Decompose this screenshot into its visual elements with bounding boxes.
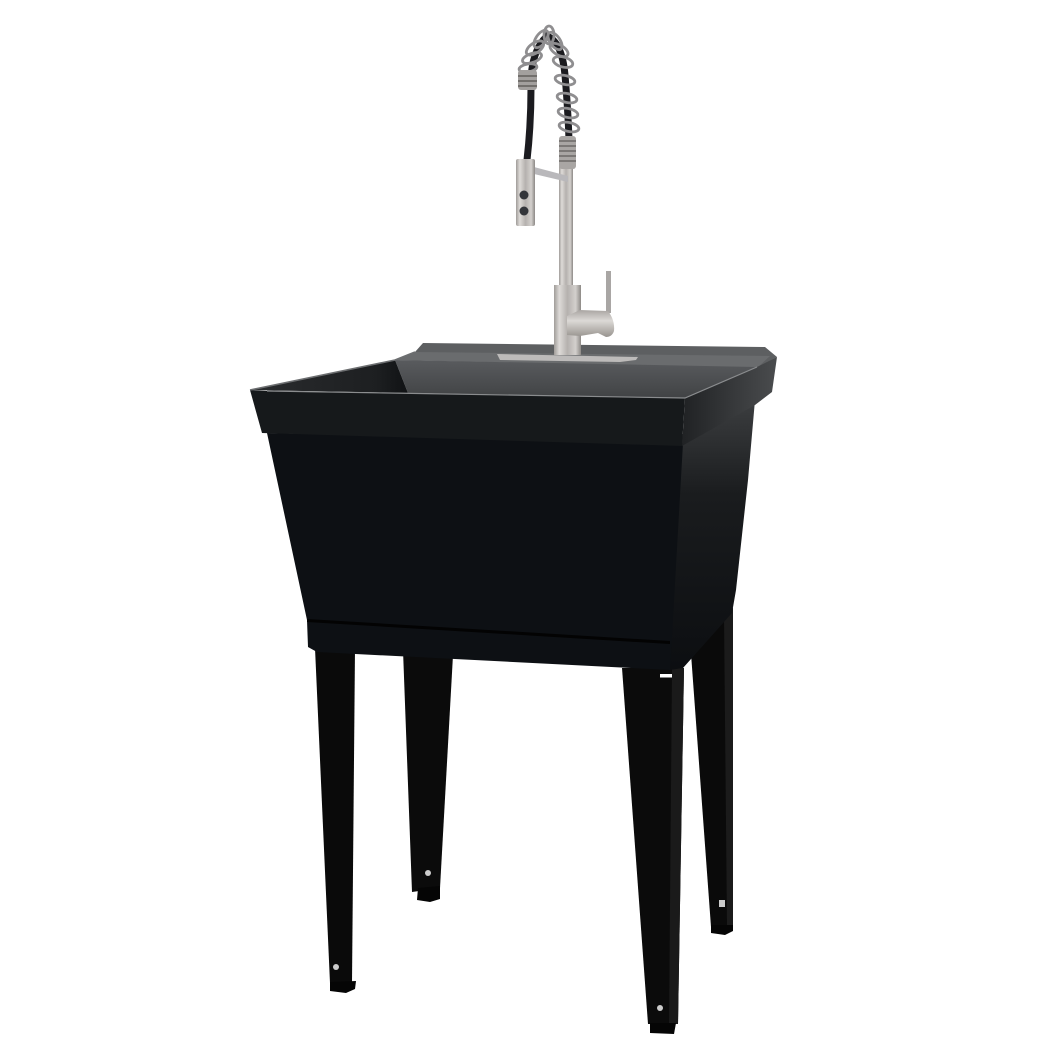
front rim [250, 390, 685, 446]
faucet [516, 26, 614, 355]
rim highlights [250, 352, 415, 390]
basin back wall [395, 360, 757, 398]
back right leg [690, 608, 733, 935]
upper spring collar [518, 70, 537, 90]
holder arm [534, 167, 568, 182]
white notch under tub [660, 674, 672, 678]
front left leg [315, 648, 356, 993]
basin left wall [250, 360, 408, 393]
coil spring [518, 26, 580, 133]
back deck [395, 343, 777, 368]
spray buttons [520, 190, 528, 216]
tub front wall [267, 433, 683, 670]
front right leg [622, 668, 684, 1034]
handle lever [606, 271, 611, 313]
right rim [682, 357, 777, 446]
faucet deck plate [497, 354, 638, 362]
lower spring collar [559, 136, 576, 169]
sink tub [250, 352, 777, 678]
pull-down spray head [516, 159, 535, 226]
back left leg [403, 650, 453, 902]
front lower band line [307, 619, 670, 644]
faucet body [554, 285, 581, 355]
spout pipe [559, 165, 573, 290]
handle hub [567, 310, 614, 337]
black hose [527, 36, 569, 160]
tub right side [670, 400, 755, 670]
